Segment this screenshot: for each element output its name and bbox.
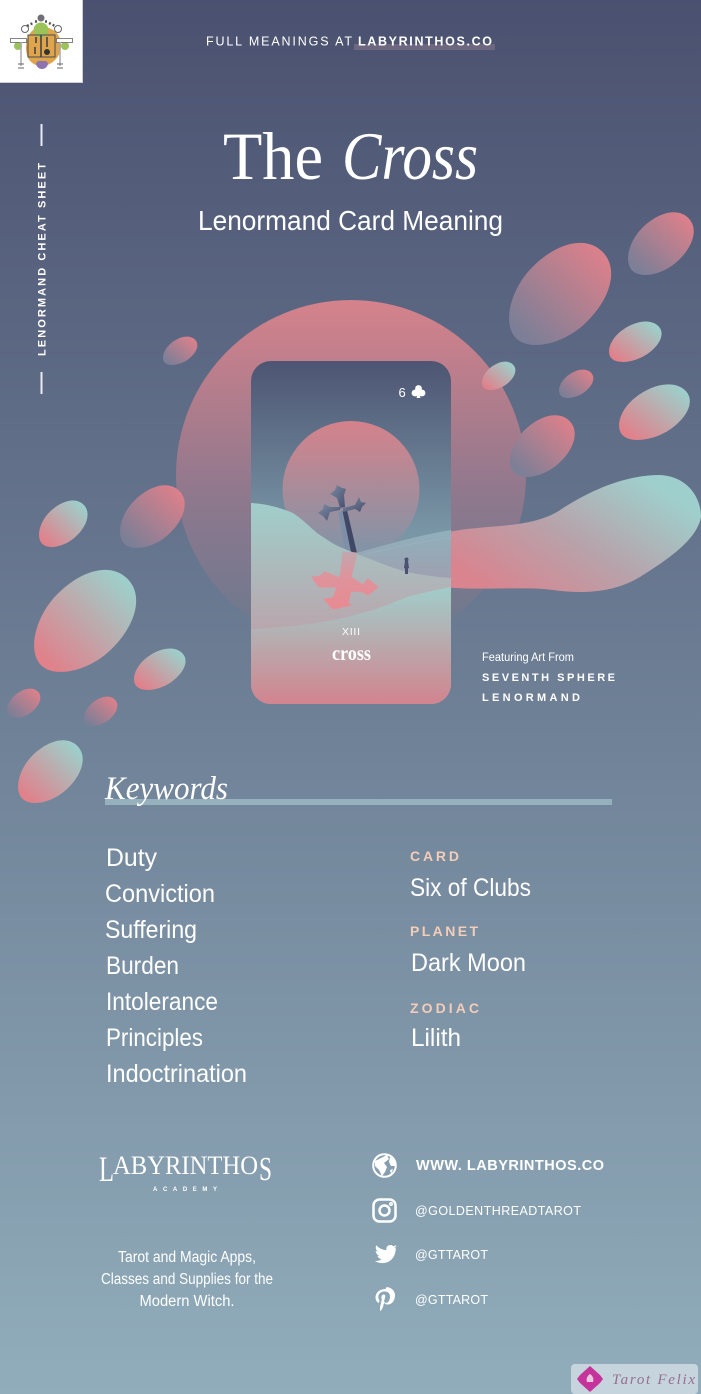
card correspondences <box>410 848 531 1052</box>
logo badge <box>0 0 83 83</box>
keyword list: Conviction <box>105 880 215 908</box>
academy logo: S <box>259 1151 272 1188</box>
reflected cross <box>312 552 378 609</box>
title <box>223 118 478 194</box>
art credit: Featuring Art From <box>482 652 574 664</box>
card name: cross <box>332 643 371 665</box>
keyword list: Indoctrination <box>106 1060 247 1088</box>
card correspondences: ZODIAC <box>410 1000 479 1016</box>
keyword list <box>105 844 247 1088</box>
subtitle: Lenormand Card Meaning <box>198 205 503 236</box>
art credit <box>482 652 615 704</box>
academy description: Tarot and Magic Apps, <box>118 1249 256 1266</box>
front dune <box>251 587 451 704</box>
art credit: LENORMAND <box>482 692 580 704</box>
academy description: Classes and Supplies for the <box>101 1271 273 1288</box>
large sun circle <box>176 300 526 650</box>
card suit: 6 <box>398 385 406 400</box>
academy description: Modern Witch. <box>140 1293 234 1310</box>
card numeral: XIII <box>342 626 360 638</box>
keyword list: Burden <box>106 952 179 980</box>
top link: LABYRINTHOS.CO <box>358 34 492 48</box>
floating blobs <box>0 201 701 815</box>
main dune <box>251 503 451 704</box>
keywords heading <box>104 771 612 807</box>
card correspondences: PLANET <box>410 923 478 939</box>
top link: FULL MEANINGS AT <box>206 34 352 48</box>
academy logo: ABYRINTHO <box>113 1151 258 1180</box>
card correspondences: Six of Clubs <box>410 874 531 902</box>
title: Cross <box>342 118 478 194</box>
title: The <box>223 118 323 194</box>
keyword list: Principles <box>106 1024 203 1052</box>
side label: LENORMAND CHEAT SHEET <box>36 163 48 356</box>
website: WWW. LABYRINTHOS.CO <box>416 1158 604 1174</box>
card correspondences: Lilith <box>411 1024 461 1052</box>
card correspondences: Dark Moon <box>411 949 526 977</box>
academy description <box>101 1249 273 1310</box>
icon: twitter <box>375 1245 398 1263</box>
watermark <box>571 1364 698 1394</box>
card correspondences: CARD <box>410 848 459 864</box>
academy logo: ACADEMY <box>153 1187 217 1193</box>
art credit: SEVENTH SPHERE <box>482 672 615 684</box>
card sun <box>282 421 420 558</box>
icon: instagram <box>374 1200 396 1222</box>
keywords heading: Keywords <box>104 771 228 807</box>
wave blob <box>445 475 701 592</box>
icon: pinterest <box>376 1287 395 1311</box>
instagram handle: @GOLDENTHREADTAROT <box>415 1204 581 1218</box>
academy logo <box>99 1149 272 1193</box>
distant hills <box>358 530 451 578</box>
figure <box>404 558 409 574</box>
tarot card <box>251 361 451 704</box>
card suit <box>398 385 425 400</box>
pinterest handle: @GTTAROT <box>415 1293 488 1307</box>
keyword list: Intolerance <box>106 988 218 1016</box>
top link <box>206 34 495 50</box>
keyword list: Duty <box>106 844 157 872</box>
icon: globe <box>373 1154 396 1177</box>
twitter handle: @GTTAROT <box>415 1248 488 1262</box>
watermark: Tarot Felix <box>612 1372 695 1388</box>
keyword list: Suffering <box>105 916 197 944</box>
upright cross <box>318 485 366 553</box>
academy logo: L <box>99 1149 114 1189</box>
